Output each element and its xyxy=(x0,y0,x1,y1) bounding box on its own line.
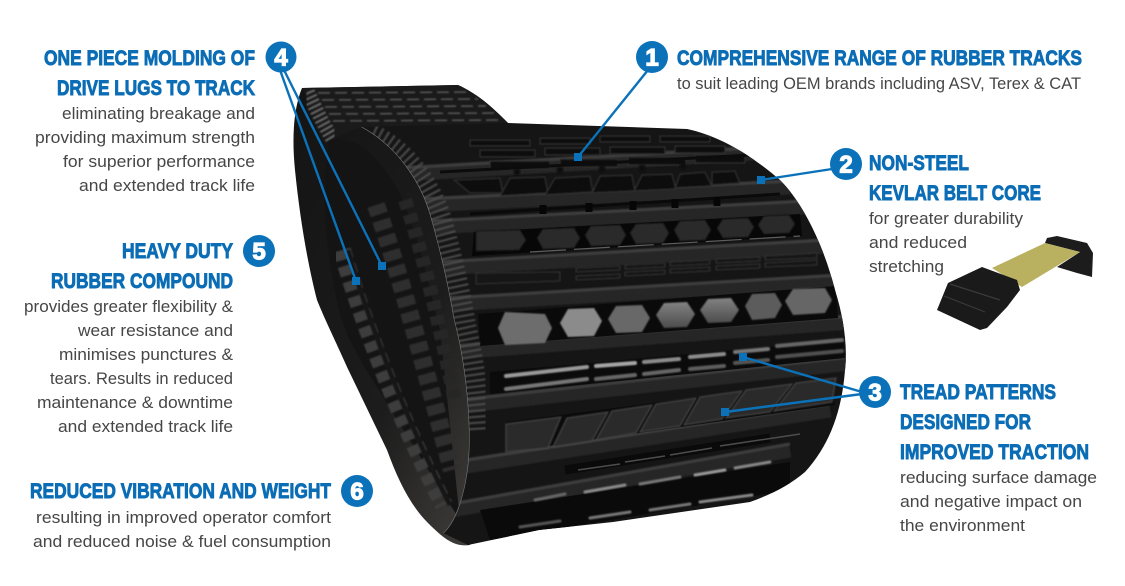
callout 5: rubber compound: tears. Results in reduced xyxy=(50,369,233,388)
callout 5: rubber compound xyxy=(24,235,275,436)
lit double bar row xyxy=(490,340,845,394)
callout 4: one piece molding: 4 xyxy=(274,44,288,72)
callout 4: one piece molding: providing maximum strength xyxy=(35,128,255,147)
far band ridged edge xyxy=(308,92,333,140)
dark hexagon lug row xyxy=(472,214,802,256)
callout 6: vibration and weight: and reduced noise & fuel consumption xyxy=(33,532,331,551)
callout 2: kevlar belt: stretching xyxy=(869,257,944,276)
callout 4: one piece molding: and extended track life xyxy=(79,176,255,195)
callout 3: tread patterns: IMPROVED TRACTION xyxy=(900,440,1089,464)
scallop lug row xyxy=(454,171,740,196)
notches row 2 xyxy=(470,194,780,214)
callout 6: vibration and weight: resulting in improved operator comfort xyxy=(36,508,331,527)
callout 4: one piece molding: ONE PIECE MOLDING OF xyxy=(44,46,255,70)
callout 2: kevlar belt: 2 xyxy=(839,152,853,178)
callout 5: rubber compound: HEAVY DUTY xyxy=(122,239,233,263)
tread face xyxy=(361,123,846,545)
small notched row xyxy=(517,163,683,175)
lit hexagon lug row xyxy=(478,286,838,346)
callout 3: tread patterns: the environment xyxy=(900,516,1025,535)
seam edge xyxy=(361,127,469,533)
ribs xyxy=(400,147,850,512)
callout 3: tread patterns xyxy=(859,376,1097,535)
callout 2: kevlar belt: NON-STEEL xyxy=(869,151,969,175)
callout 1: rubber tracks: to suit leading OEM brands including ASV, Terex & CAT xyxy=(677,74,1081,93)
callout 6: vibration and weight: REDUCED VIBRATION AND WEIGHT xyxy=(30,479,331,503)
callout 5: rubber compound: wear resistance and xyxy=(77,321,233,340)
callout 2: kevlar belt: and reduced xyxy=(869,233,967,252)
callout 5: rubber compound: maintenance & downtime xyxy=(37,393,233,412)
icon: belt core section xyxy=(937,236,1093,330)
callout 6: vibration and weight xyxy=(30,475,373,551)
callout 2: kevlar belt: for greater durability xyxy=(869,209,1024,228)
lower tread rows xyxy=(565,438,770,470)
callout 5: rubber compound: minimises punctures & xyxy=(59,345,234,364)
callout 3: tread patterns: 3 xyxy=(868,380,882,406)
callout 3: tread patterns: DESIGNED FOR xyxy=(900,410,1031,434)
top rows xyxy=(470,136,745,169)
callout 1: rubber tracks: 1 xyxy=(645,44,659,72)
callout 2: kevlar belt: KEVLAR BELT CORE xyxy=(869,181,1041,205)
callout 6: vibration and weight: 6 xyxy=(350,478,364,506)
callout 5: rubber compound: provides greater flexibility & xyxy=(24,297,234,316)
callout 4: one piece molding: eliminating breakage and xyxy=(62,104,255,123)
callout 4: one piece molding: DRIVE LUGS TO TRACK xyxy=(57,76,255,100)
callout 3: tread patterns: and negative impact on xyxy=(900,492,1082,511)
ridged face edge along seam xyxy=(372,135,480,433)
callout 4: one piece molding xyxy=(35,42,296,195)
drive lugs xyxy=(342,200,455,505)
callout 5: rubber compound: and extended track life xyxy=(58,417,233,436)
callout 5: rubber compound: 5 xyxy=(252,238,266,266)
callout 3: tread patterns: reducing surface damage xyxy=(900,468,1097,487)
track side wall and far band xyxy=(293,85,520,545)
slanted lug row xyxy=(506,397,835,446)
callout 5: rubber compound: RUBBER COMPOUND xyxy=(51,269,233,293)
callout 4: one piece molding: for superior performance xyxy=(63,152,255,171)
callout lines and markers xyxy=(280,70,862,416)
tyre track photo xyxy=(293,85,860,560)
callout 1: rubber tracks xyxy=(636,41,1082,93)
small double bar row xyxy=(476,253,817,284)
inner hollow xyxy=(325,139,460,520)
callout 3: tread patterns: TREAD PATTERNS xyxy=(900,380,1056,404)
callout 2: kevlar belt xyxy=(830,148,1041,276)
